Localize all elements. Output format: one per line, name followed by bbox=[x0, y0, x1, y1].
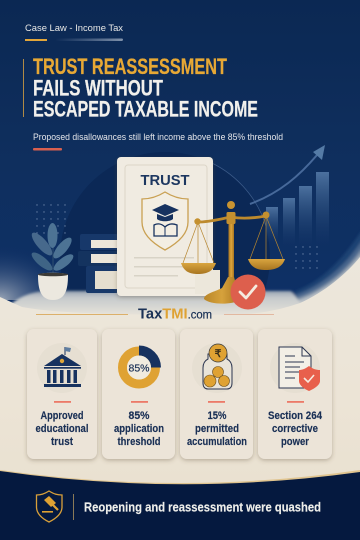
decorative dot grid right bbox=[292, 246, 322, 274]
footer band bbox=[0, 470, 360, 540]
subtitle: Proposed disallowances still left income above the 85% threshold bbox=[33, 132, 283, 142]
icon: gavel shield bbox=[36, 491, 62, 522]
eyebrow: category label bbox=[25, 23, 123, 41]
card label: corrective bbox=[272, 423, 318, 435]
icon: institution building bbox=[37, 343, 87, 393]
card label: accumulation bbox=[187, 436, 247, 448]
brand divider lines bbox=[36, 314, 274, 315]
card label: threshold bbox=[118, 436, 160, 448]
card label bbox=[268, 410, 322, 448]
card label: 85% bbox=[128, 410, 150, 422]
card label: permitted bbox=[195, 423, 239, 435]
title: TRUST REASSESSMENT bbox=[33, 54, 227, 79]
card label: trust bbox=[51, 436, 73, 448]
icon: coin jar: ₹ bbox=[215, 348, 222, 360]
dark circle backdrop bbox=[60, 152, 270, 362]
decorative dot grid left bbox=[36, 202, 69, 235]
cream lower panel bbox=[0, 257, 360, 540]
card label: application bbox=[114, 423, 164, 435]
floor surface and right arc band bbox=[12, 230, 360, 318]
card label: Section 264 bbox=[268, 410, 322, 422]
card label bbox=[114, 410, 164, 448]
stack of books bbox=[78, 234, 118, 293]
plant in pot bbox=[29, 223, 76, 300]
eyebrow: category label: Case Law - Income Tax bbox=[25, 23, 123, 33]
document: trust deed bbox=[117, 157, 213, 296]
card: section 264 bbox=[258, 329, 332, 459]
bar chart with rising arrow bbox=[250, 145, 329, 246]
card: approved educational trust bbox=[27, 329, 97, 459]
document heading: TRUST bbox=[140, 173, 190, 189]
brand: TaxTMI.com: TaxTMI.com bbox=[138, 306, 212, 322]
circle rim line bbox=[205, 160, 266, 226]
left floor haze bbox=[0, 245, 75, 300]
scale of justice bbox=[181, 201, 285, 304]
donut chart 85%: 85% bbox=[128, 362, 150, 374]
icon: shield with cap and book bbox=[142, 192, 188, 250]
card: 15% accumulation bbox=[180, 329, 253, 459]
card label: Approved bbox=[40, 410, 84, 422]
card label: educational bbox=[36, 423, 88, 435]
title: FAILS WITHOUT bbox=[33, 76, 163, 100]
card label: 15% bbox=[208, 410, 227, 422]
check badge bbox=[230, 274, 266, 310]
second page behind scale bbox=[195, 270, 220, 294]
card label bbox=[187, 410, 247, 448]
icon: document with shield bbox=[270, 343, 320, 393]
card label bbox=[36, 410, 88, 448]
footer message: Reopening and reassessment were quashed bbox=[84, 500, 321, 514]
card: 85% threshold bbox=[102, 329, 175, 459]
title: ESCAPED TAXABLE INCOME bbox=[33, 96, 258, 122]
title bbox=[23, 54, 258, 122]
card label: power bbox=[281, 436, 310, 448]
